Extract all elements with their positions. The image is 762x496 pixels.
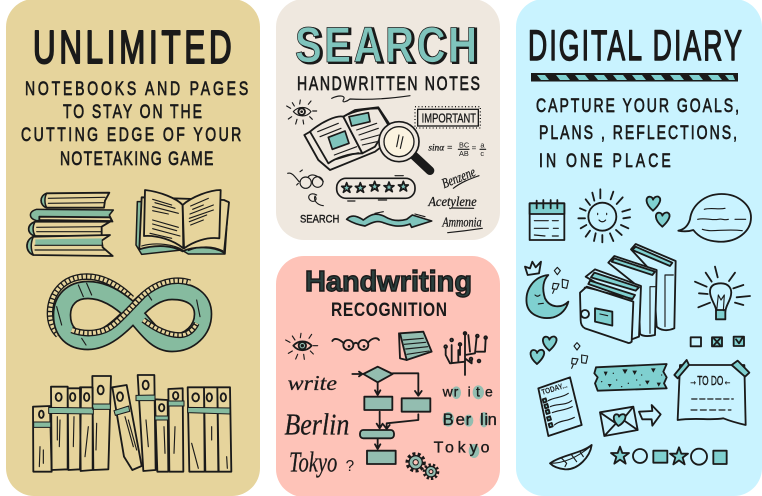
icon: hearts lower left: [531, 337, 557, 364]
icon: washi tape: [594, 364, 667, 391]
recognized words with highlights: write: [442, 384, 493, 400]
icon: gears: [407, 454, 438, 479]
icon: sparkles near moon: [552, 267, 568, 293]
icon: notepad: [399, 332, 432, 360]
label: ammonia: [442, 215, 482, 233]
recognized words with highlights: [434, 384, 497, 458]
icon: glasses: [332, 338, 379, 350]
recognized words with highlights: Tokyo: [434, 440, 490, 457]
handwritten words: [284, 373, 349, 479]
text: sine formula: BC: [459, 140, 470, 149]
icon: bookshelf row: [33, 375, 231, 472]
icon: eye with rays: [287, 100, 317, 124]
text block: digital diary description: CAPTURE YOUR GOALS,: [536, 95, 739, 117]
text: sine formula: c: [480, 149, 484, 158]
row of stars circles and squares: [611, 447, 727, 465]
icon: to do note: →TO DO←: [689, 374, 732, 388]
text: sine formula: sinα =: [428, 143, 453, 153]
icon: open book: [136, 190, 229, 254]
text: sine formula: a: [480, 140, 485, 149]
icon: glasses: [288, 170, 323, 188]
recognized words with highlights: Berlin: [443, 410, 497, 429]
icon: light bulb: [695, 267, 750, 319]
icon: magnifying glass: [379, 122, 430, 171]
heading: handwriting: Handwriting: [305, 266, 472, 298]
panel: unlimited: [6, 0, 260, 496]
panel: handwriting recognition: [276, 256, 500, 496]
icon: sparkles lower left: [572, 343, 588, 368]
icon: speech bubble: [678, 194, 751, 242]
handwritten words: write: [288, 373, 337, 395]
text block: digital diary description: [536, 95, 739, 172]
text block: unlimited description: CUTTING EDGE OF YOUR: [21, 124, 241, 146]
heading: search: SEARCH: [297, 18, 479, 74]
label: benzene: Benzene: [440, 165, 478, 192]
icon: open book under magnifier: [304, 107, 397, 170]
icon: eye: [286, 333, 318, 359]
label: search: SEARCH: [300, 214, 339, 226]
handwritten words: Berlin: [284, 407, 349, 441]
subheading: recognition: RECOGNITION: [331, 298, 447, 320]
text block: digital diary description: IN ONE PLACE: [539, 150, 671, 172]
icon: circuit tree: [444, 332, 487, 375]
icon: calendar: [530, 200, 564, 240]
panel: digital diary: [516, 0, 762, 496]
text: sine formula: =: [472, 144, 477, 153]
text block: unlimited description: NOTETAKING GAME: [60, 148, 213, 170]
icon: hearts: [647, 197, 670, 227]
icon: envelope with heart: [600, 407, 638, 436]
handwritten words: Tokyo: [289, 448, 337, 479]
heading: unlimited: UNLIMITED: [33, 22, 232, 74]
label: acetylene: Acetylene: [427, 194, 477, 209]
subheading: handwritten notes: HANDWRITTEN NOTES: [297, 73, 480, 95]
icon: sun: [578, 189, 630, 242]
icon: today list: [538, 377, 582, 436]
rating pill with five stars: [337, 176, 415, 201]
text block: unlimited description: NOTEBOOKS AND PAGES: [25, 78, 248, 100]
label: benzene: [440, 165, 479, 192]
text block: unlimited description: [21, 78, 248, 170]
text block: unlimited description: TO STAY ON THE: [63, 101, 202, 123]
text: sine formula: AB: [459, 149, 469, 158]
icon: checkboxes: [691, 337, 744, 346]
icon: infinity ribbon: [50, 277, 203, 345]
icon: to do note: [674, 360, 749, 425]
text block: digital diary description: PLANS , REFLECTIONS,: [539, 122, 737, 144]
label: ammonia: Ammonia: [442, 215, 482, 230]
label: important: IMPORTANT: [422, 111, 476, 125]
striped divider bar: [531, 73, 738, 82]
icon: stack of diaries: [580, 244, 676, 343]
flowchart: [352, 367, 430, 464]
icon: today list: TODAY...: [540, 381, 568, 397]
label: important: [415, 107, 480, 128]
text: question mark: ?: [346, 458, 354, 475]
panel: search: [276, 0, 500, 240]
icon: stack of books: [27, 193, 113, 256]
icon: moon with crown: [525, 262, 568, 318]
heading: digital diary: DIGITAL DIARY: [528, 22, 742, 70]
icon: outline arrow: [639, 405, 661, 426]
heading: search: SEARCH: [295, 17, 477, 73]
icon: feather: [550, 445, 592, 469]
arrow: squiggle to the right: [347, 212, 432, 227]
text: sine formula: [428, 140, 486, 158]
